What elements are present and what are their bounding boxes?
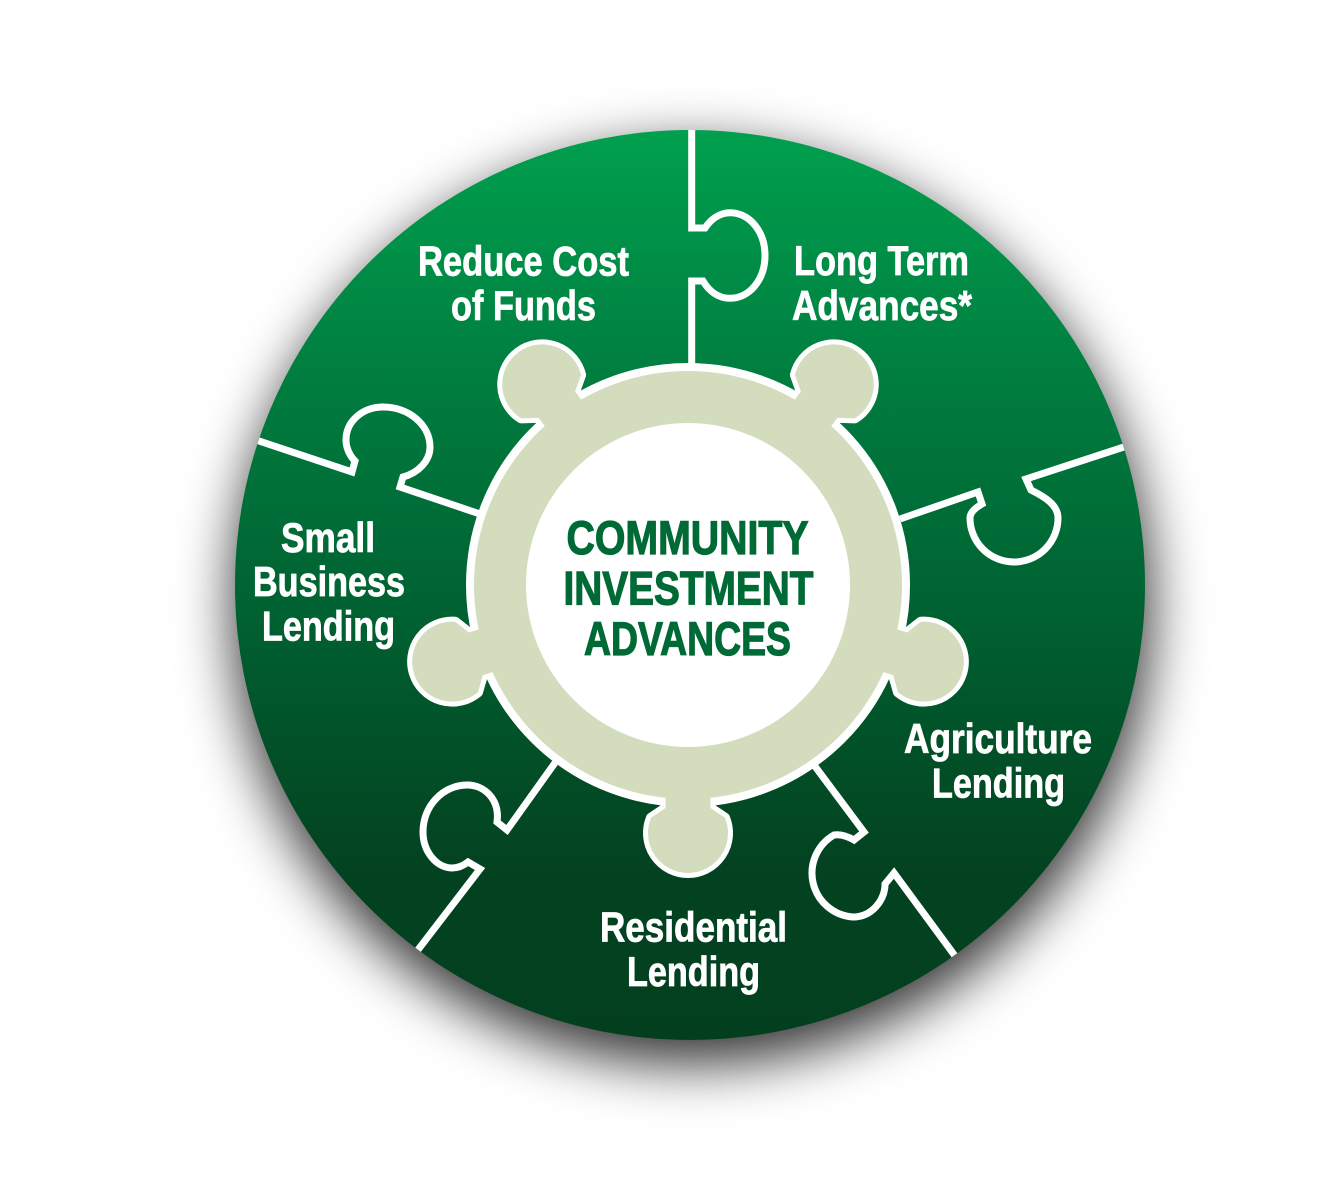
cut line: lower right — [812, 765, 958, 960]
label: Small Business Lending: Lending — [262, 602, 395, 650]
drop shadow — [234, 148, 1150, 1064]
central title: ADVANCES — [584, 613, 791, 666]
label: Small Business Lending — [253, 514, 405, 650]
green gradient disc — [235, 130, 1145, 1040]
hub cream ring and knobs — [402, 328, 974, 873]
cut line: right — [900, 445, 1130, 562]
puzzle wheel infographic — [189, 103, 1195, 1109]
cut line: lower left — [414, 760, 557, 955]
label: Long Term Advances — [792, 237, 973, 329]
label: Small Business Lending: Small — [281, 514, 375, 561]
hub white outline — [402, 328, 974, 873]
label: Reduce Cost of Funds: of Funds — [451, 282, 596, 329]
label: Agriculture Lending — [904, 715, 1092, 806]
cut line: upper left — [250, 407, 486, 516]
cut line: top — [692, 125, 765, 370]
puzzle piece cut lines — [250, 125, 1130, 960]
label: Reduce Cost of Funds: Reduce Cost — [418, 238, 629, 284]
central title: COMMUNITY — [566, 512, 808, 565]
central hub with five knobs — [402, 328, 974, 873]
label: Small Business Lending: Business — [253, 558, 405, 605]
central title: INVESTMENT — [564, 562, 814, 616]
label: Residential Lending: Lending — [627, 948, 760, 995]
label: Residential Lending — [600, 904, 787, 995]
label: Long Term Advances: Advances* — [792, 282, 973, 329]
label: Long Term Advances: Long Term — [794, 237, 969, 284]
label: Agriculture Lending: Lending — [932, 760, 1065, 806]
label: Residential Lending: Residential — [600, 904, 787, 950]
label: Agriculture Lending: Agriculture — [904, 715, 1092, 762]
central title — [564, 512, 814, 666]
hub white centre — [526, 423, 850, 747]
label: Reduce Cost of Funds — [418, 238, 629, 329]
